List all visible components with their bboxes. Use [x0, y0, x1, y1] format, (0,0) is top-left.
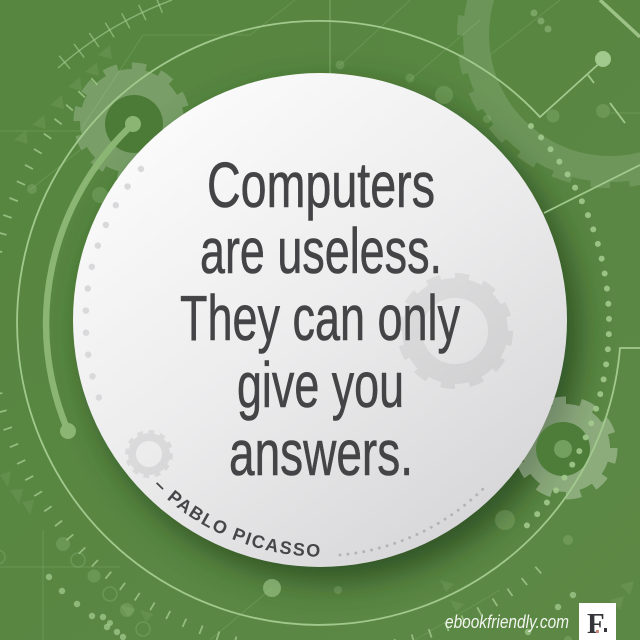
gear: large top right	[462, 0, 640, 183]
logo: F	[587, 608, 605, 640]
crossed arc top left	[58, 0, 172, 68]
gear: top left	[78, 67, 186, 175]
logo	[579, 603, 616, 640]
dotted arc on disc: left	[86, 169, 141, 398]
quote text: Computers	[207, 149, 435, 221]
site name: ebookfriendly.com	[445, 611, 569, 632]
white disc	[73, 73, 567, 567]
tick marks outer ring	[0, 81, 545, 640]
faint outlined circles	[0, 550, 150, 636]
gear: right lower	[520, 402, 612, 494]
dotted arc on disc: bottom right	[340, 484, 488, 555]
dotted arc green: right	[517, 126, 609, 535]
gear inside disc: lower left	[127, 432, 171, 476]
thick light line top right	[600, 0, 640, 37]
quote text: give you	[237, 349, 404, 421]
quote text: They can only	[180, 282, 460, 354]
gear inside disc: right	[401, 277, 509, 385]
quote text: answers.	[229, 417, 413, 489]
quote text: are useless.	[200, 215, 442, 287]
shadow of disc	[84, 86, 580, 582]
attribution: – PABLO PICASSO	[156, 482, 320, 557]
node with line bottom	[263, 579, 281, 597]
thick arc with nodes	[46, 116, 141, 439]
quote text	[180, 149, 460, 489]
